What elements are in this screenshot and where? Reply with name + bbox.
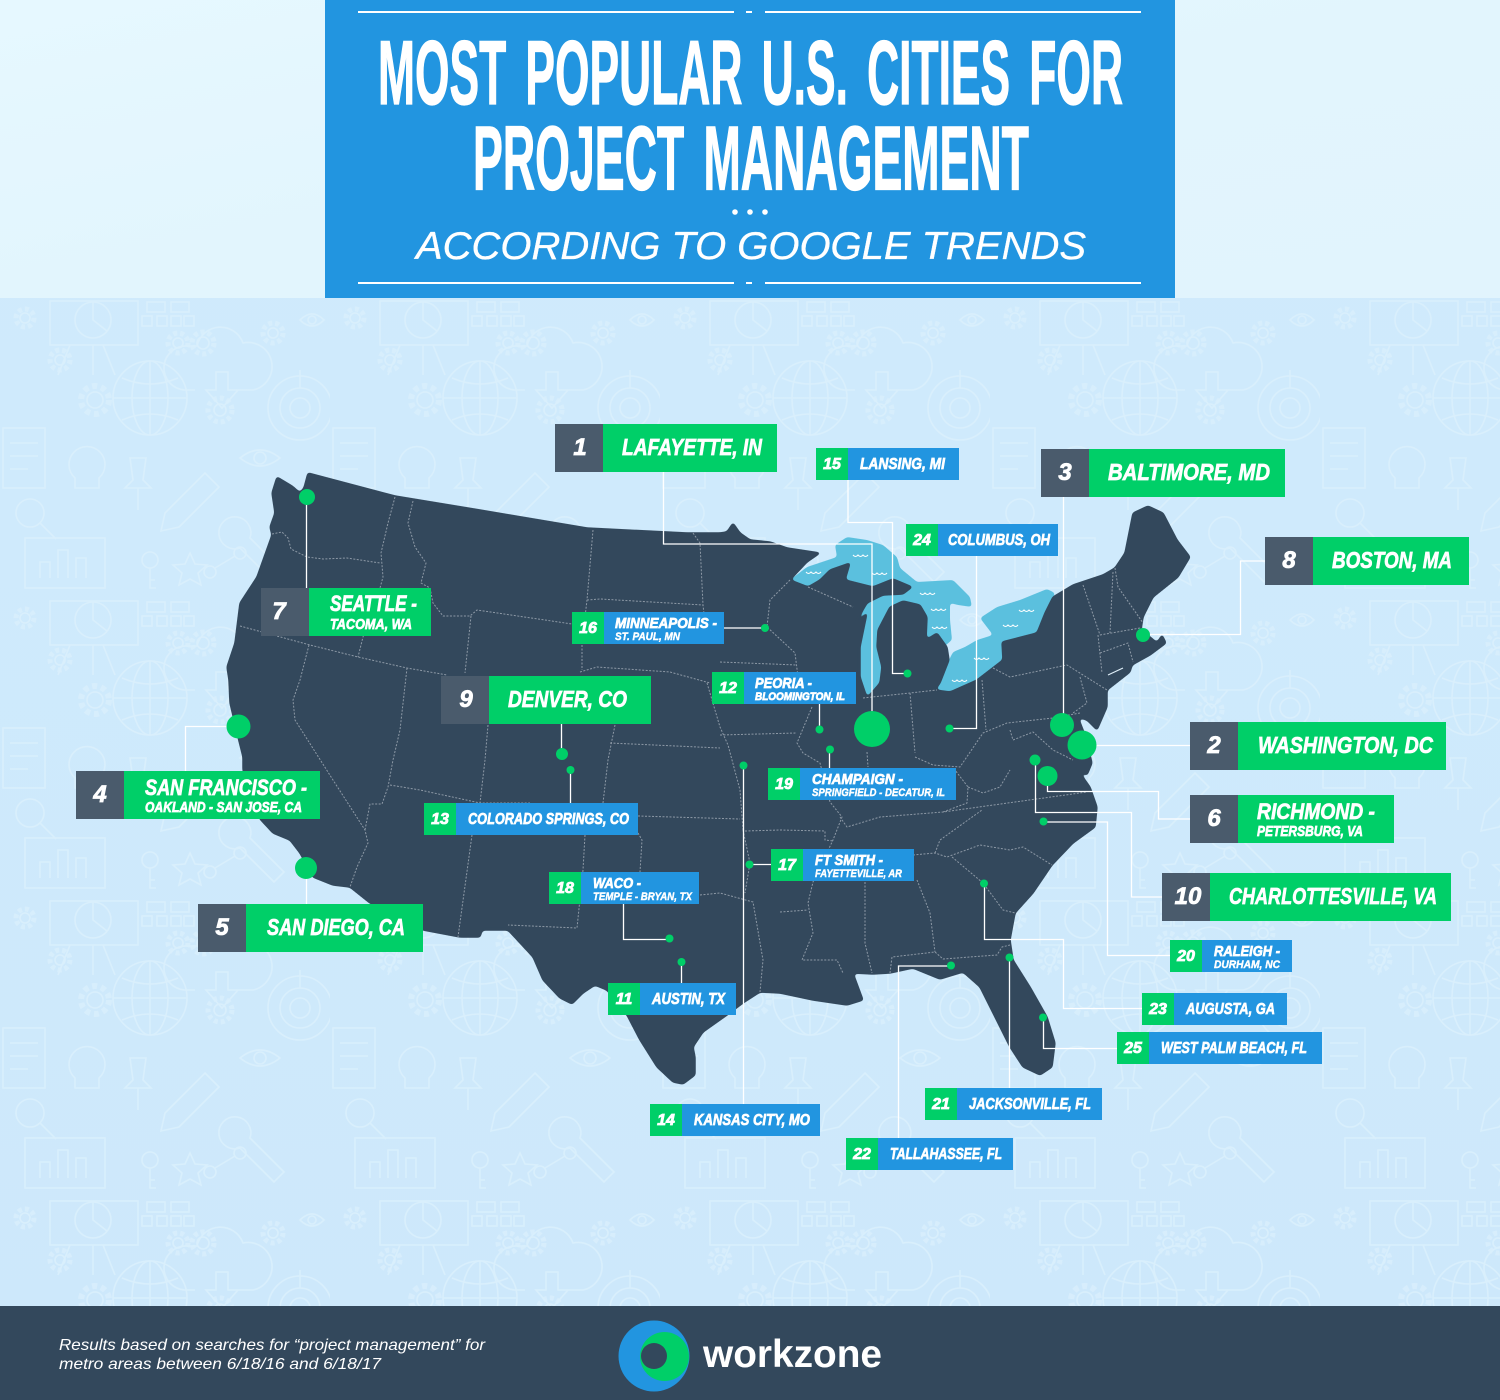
- label 4: San Francisco: SAN FRANCISCO -: [145, 775, 307, 800]
- label 6: Richmond: [1190, 795, 1394, 843]
- label 24: Columbus: [906, 524, 1058, 556]
- label 7: Seattle: 7: [272, 598, 287, 625]
- label 10: Charlottesville: CHARLOTTESVILLE, VA: [1229, 883, 1437, 909]
- footnote: metro areas between 6/18/16 and 6/18/17: [59, 1356, 382, 1373]
- label 10: Charlottesville: [1162, 873, 1451, 921]
- title: [378, 23, 1123, 210]
- label 19: Champaign: 19: [775, 776, 793, 793]
- label 10: Charlottesville: 10: [1175, 883, 1202, 910]
- label 16: Minneapolis: MINNEAPOLIS -: [615, 616, 717, 632]
- label 13: Colorado Springs: COLORADO SPRINGS, CO: [468, 811, 629, 828]
- label 12: Peoria: 12: [719, 680, 737, 697]
- label 18: Waco: TEMPLE - BRYAN, TX: [593, 891, 693, 903]
- label 14: Kansas City: KANSAS CITY, MO: [694, 1112, 810, 1129]
- label 7: Seattle: [261, 588, 431, 636]
- label 21: Jacksonville: 21: [931, 1096, 950, 1113]
- workzone logo mark: [618, 1320, 690, 1392]
- label 12: Peoria: BLOOMINGTON, IL: [755, 691, 845, 703]
- label 4: San Francisco: [76, 771, 320, 819]
- label 2: Washington: [1190, 722, 1446, 770]
- label 19: Champaign: SPRINGFIELD - DECATUR, IL: [812, 787, 945, 799]
- label 17: Ft Smith: FT SMITH -: [815, 853, 883, 869]
- label 8: Boston: 8: [1282, 547, 1296, 574]
- label 16: Minneapolis: [572, 612, 724, 644]
- label 22: Tallahassee: [846, 1138, 1013, 1170]
- label 20: Raleigh: DURHAM, NC: [1214, 959, 1281, 971]
- label 20: Raleigh: RALEIGH -: [1214, 944, 1280, 960]
- label 25: West Palm Beach: [1117, 1032, 1322, 1064]
- city dots: [226, 489, 1150, 1022]
- label 16: Minneapolis: 16: [579, 620, 597, 637]
- footnote: [59, 1337, 486, 1373]
- contiguous US land: [227, 473, 1190, 1084]
- label 18: Waco: WACO -: [593, 876, 641, 892]
- label 16: Minneapolis: ST. PAUL, MN: [615, 631, 681, 643]
- label 25: West Palm Beach: 25: [1123, 1040, 1143, 1057]
- label 24: Columbus: COLUMBUS, OH: [948, 532, 1050, 549]
- label 9: Denver: DENVER, CO: [508, 686, 627, 712]
- label 18: Waco: 18: [556, 880, 574, 897]
- label 15: Lansing: [816, 448, 959, 480]
- label 24: Columbus: 24: [912, 532, 931, 549]
- label 11: Austin: [608, 983, 736, 1015]
- state borders: [240, 497, 1143, 992]
- label 3: Baltimore: BALTIMORE, MD: [1108, 459, 1270, 485]
- label 14: Kansas City: [650, 1104, 820, 1136]
- label 15: Lansing: LANSING, MI: [860, 456, 945, 473]
- label 19: Champaign: CHAMPAIGN -: [812, 772, 903, 788]
- label 22: Tallahassee: TALLAHASSEE, FL: [890, 1146, 1002, 1163]
- label 15: Lansing: 15: [823, 456, 842, 473]
- label 20: Raleigh: 20: [1176, 948, 1195, 965]
- label 25: West Palm Beach: WEST PALM BEACH, FL: [1161, 1040, 1307, 1057]
- US map: [227, 473, 1190, 1084]
- label 19: Champaign: [768, 768, 956, 800]
- label 9: Denver: [441, 676, 651, 724]
- footnote: Results based on searches for “project management” for: [59, 1337, 486, 1354]
- header panel: [325, 0, 1175, 298]
- label 17: Ft Smith: [771, 849, 914, 881]
- label 11: Austin: AUSTIN, TX: [651, 991, 726, 1008]
- label 2: Washington: WASHINGTON, DC: [1258, 732, 1433, 758]
- label 9: Denver: 9: [459, 686, 473, 713]
- label 2: Washington: 2: [1206, 732, 1221, 759]
- label 18: Waco: [549, 872, 699, 904]
- label 11: Austin: 11: [616, 991, 632, 1008]
- label 1: Lafayette: 1: [573, 434, 587, 461]
- leader lines: [186, 472, 1265, 1138]
- label 6: Richmond: RICHMOND -: [1257, 799, 1375, 824]
- label 3: Baltimore: [1041, 449, 1285, 497]
- label 8: Boston: BOSTON, MA: [1332, 547, 1452, 573]
- workzone wordmark: workzone: [702, 1333, 882, 1376]
- footer: [0, 1306, 1500, 1400]
- label 1: Lafayette: LAFAYETTE, IN: [622, 434, 762, 460]
- label 8: Boston: [1265, 537, 1469, 585]
- label 20: Raleigh: [1170, 940, 1292, 972]
- label 17: Ft Smith: FAYETTEVILLE, AR: [815, 868, 902, 880]
- label 6: Richmond: 6: [1207, 805, 1221, 832]
- label 23: Augusta: AUGUSTA, GA: [1185, 1001, 1275, 1018]
- label 1: Lafayette: [555, 424, 777, 472]
- label 5: San Diego: SAN DIEGO, CA: [267, 914, 405, 940]
- label 4: San Francisco: OAKLAND - SAN JOSE, CA: [145, 800, 302, 816]
- label 5: San Diego: 5: [215, 914, 229, 941]
- label 13: Colorado Springs: 13: [431, 811, 449, 828]
- label 13: Colorado Springs: [424, 803, 638, 835]
- label 17: Ft Smith: 17: [778, 857, 797, 874]
- label 6: Richmond: PETERSBURG, VA: [1257, 824, 1363, 840]
- great lakes: [790, 537, 1055, 700]
- label 23: Augusta: [1142, 993, 1287, 1025]
- label 22: Tallahassee: 22: [852, 1146, 871, 1163]
- label 21: Jacksonville: JACKSONVILLE, FL: [969, 1096, 1091, 1113]
- label 7: Seattle: TACOMA, WA: [330, 617, 412, 633]
- label 23: Augusta: 23: [1148, 1001, 1167, 1018]
- label 3: Baltimore: 3: [1058, 459, 1072, 486]
- subtitle: ACCORDING TO GOOGLE TRENDS: [414, 225, 1086, 268]
- label 5: San Diego: [198, 904, 423, 952]
- label 7: Seattle: SEATTLE -: [330, 591, 417, 616]
- label 12: Peoria: PEORIA -: [755, 676, 812, 692]
- label 12: Peoria: [712, 672, 856, 704]
- label 4: San Francisco: 4: [92, 781, 107, 808]
- label 21: Jacksonville: [925, 1088, 1102, 1120]
- label 14: Kansas City: 14: [657, 1112, 675, 1129]
